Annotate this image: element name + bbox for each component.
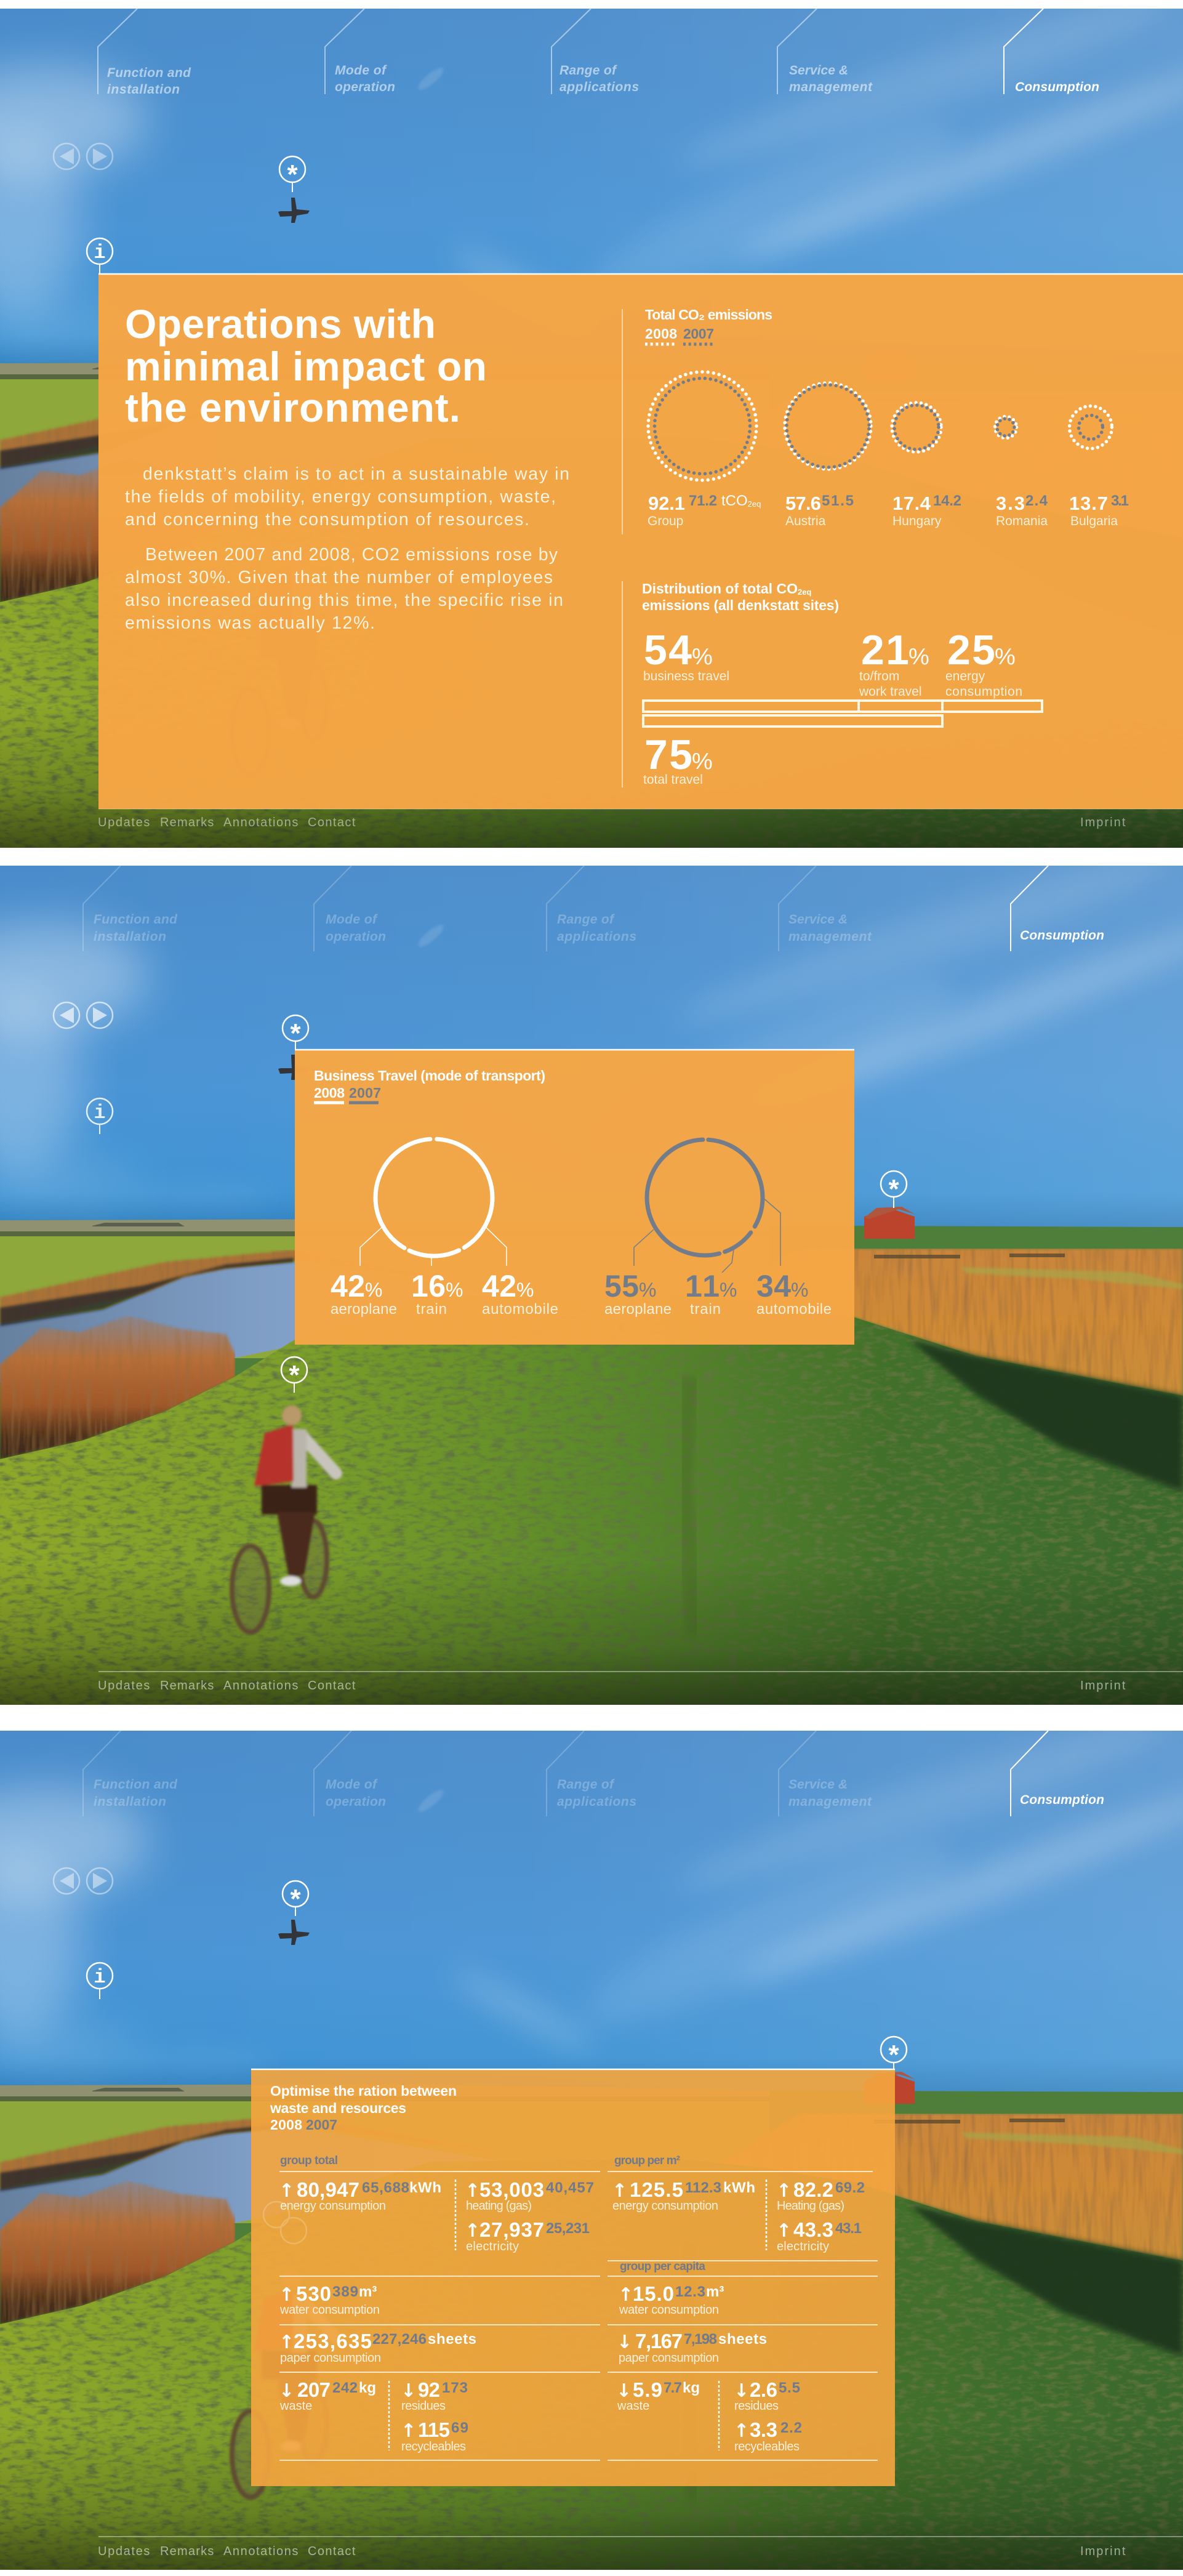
2007 values: 55 <box>604 1269 639 1303</box>
water consumption: m³ <box>359 2284 377 2300</box>
total travel: total travel <box>643 773 703 787</box>
values and country labels: tCO <box>721 493 748 509</box>
body text: almost 30%. Given that the number of employees <box>125 568 553 587</box>
paper consumption <box>279 2330 476 2365</box>
energy per square metre: 112.3 <box>685 2180 721 2196</box>
percentages <box>643 627 1022 699</box>
2007 values: 11 <box>685 1269 720 1303</box>
percentages: consumption <box>945 685 1022 699</box>
percentages: % <box>908 644 929 670</box>
heating and electricity per square metre: 43.1 <box>835 2220 862 2237</box>
paper consumption: ↑ <box>279 2332 294 2353</box>
navigation tabs: Service & <box>788 912 848 927</box>
icon: star marker on barn <box>881 1171 907 1208</box>
navigation tabs: Consumption <box>1020 928 1104 943</box>
footer links: Imprint <box>1080 816 1126 829</box>
chart heading and legend <box>645 307 772 344</box>
orange content panel <box>98 274 1183 809</box>
navigation tabs: management <box>789 80 873 94</box>
panel: overview with CO2 emissions <box>0 0 1183 848</box>
orange chart panel <box>295 1050 854 1345</box>
energy consumption <box>279 2178 441 2213</box>
navigation tabs: installation <box>94 930 166 944</box>
waste, residues, recycleables: 207 <box>297 2378 331 2401</box>
heating and electricity per square metre: 82.2 <box>793 2178 833 2201</box>
2008 values: 42 <box>482 1269 516 1303</box>
waste per capita: kg <box>683 2380 700 2396</box>
heating and electricity per square metre <box>776 2178 865 2253</box>
percentages: work travel <box>859 685 922 699</box>
values and country labels: 57.6 <box>785 493 821 514</box>
navigation tabs: Service & <box>789 63 848 78</box>
navigation tabs: operation <box>335 80 395 94</box>
waste, residues, recycleables: kg <box>359 2380 376 2396</box>
heating and electricity per square metre: Heating (gas) <box>777 2199 844 2213</box>
chart heading: Distribution of total CO <box>642 581 798 597</box>
icon: previous and next arrows <box>54 143 113 169</box>
chart heading and legend: Business Travel (mode of transport) <box>314 1068 545 1084</box>
navigation tabs: operation <box>326 1795 386 1809</box>
navigation tabs: Mode of <box>326 912 378 927</box>
chart heading and legend: 2007 <box>349 1085 381 1101</box>
paper per capita: ↓ <box>617 2332 632 2353</box>
table: group total: group total <box>280 2154 338 2167</box>
icon: info marker <box>87 238 113 274</box>
waste, residues, recycleables: 92 <box>418 2378 440 2401</box>
footer links <box>98 1672 1183 1693</box>
body text: Between 2007 and 2008, CO2 emissions rose by <box>145 545 558 565</box>
waste per capita: residues <box>734 2399 779 2413</box>
waste per capita: 2.6 <box>750 2378 777 2401</box>
water consumption: water consumption <box>279 2303 380 2317</box>
percentages: to/from <box>859 669 899 683</box>
waste, residues, recycleables: residues <box>401 2399 446 2413</box>
title: minimal impact on <box>125 344 487 389</box>
heating and electricity per square metre: ↑ <box>776 2220 792 2242</box>
paper consumption: paper consumption <box>280 2351 381 2365</box>
icon: star marker on plane <box>279 156 305 192</box>
icon: star marker on plane <box>283 1881 308 1916</box>
waste, residues, recycleables: ↑ <box>401 2420 416 2442</box>
body text: the fields of mobility, energy consumption, waste, <box>125 487 556 507</box>
2008 values: % <box>446 1279 463 1301</box>
body text: denkstatt’s claim is to act in a sustainable way in <box>143 464 569 484</box>
footer links: Contact <box>308 816 356 829</box>
heating and electricity <box>465 2178 594 2253</box>
navigation tabs <box>83 1731 1104 1816</box>
2008 values: automobile <box>482 1301 558 1318</box>
body text: emissions was actually 12%. <box>125 613 375 633</box>
total travel: 75 <box>644 731 692 778</box>
panel: business travel <box>0 836 1183 1705</box>
water per capita: ↑ <box>618 2284 633 2306</box>
icon: previous and next arrows <box>54 1868 113 1894</box>
heating and electricity per square metre: 43.3 <box>793 2218 833 2241</box>
values and country labels: 14.2 <box>933 493 961 509</box>
values and country labels: Austria <box>785 514 826 528</box>
chart heading and legend: 2007 <box>683 326 714 342</box>
footer links: Contact <box>308 1679 356 1693</box>
chart heading and legend <box>314 1068 545 1103</box>
panel heading: 2008 <box>270 2117 302 2133</box>
footer links: Remarks <box>160 816 214 829</box>
panel heading <box>270 2083 457 2133</box>
percentages: business travel <box>643 669 729 683</box>
water consumption: 530 <box>296 2282 331 2305</box>
navigation tabs: applications <box>557 930 636 944</box>
chart heading and legend: 2008 <box>314 1085 345 1101</box>
waste per capita: ↓ <box>616 2380 632 2402</box>
icon: info marker <box>87 1098 113 1134</box>
energy consumption: 65,688 <box>362 2180 409 2196</box>
water per capita: water consumption <box>619 2303 719 2317</box>
navigation tabs: Function and <box>94 912 178 927</box>
icon: previous and next arrows <box>54 1002 113 1028</box>
2008 values: % <box>516 1279 534 1301</box>
title: Operations with <box>125 301 436 347</box>
water per capita: 15.0 <box>633 2282 674 2305</box>
dotted circles <box>648 372 1112 480</box>
navigation tabs: Mode of <box>326 1777 378 1792</box>
chart: total CO2 emissions <box>622 307 1129 534</box>
footer links: Remarks <box>160 1679 214 1693</box>
waste, residues, recycleables <box>279 2378 468 2453</box>
percentages: % <box>995 644 1016 670</box>
icon: star marker on plane: * <box>290 1018 301 1049</box>
icon: info marker: i <box>94 1101 106 1124</box>
values and country labels: 92.1 <box>648 493 685 514</box>
table: group total <box>279 2154 600 2460</box>
2007 values: % <box>791 1279 808 1301</box>
waste, residues, recycleables: 173 <box>442 2380 468 2396</box>
navigation tabs: operation <box>326 930 386 944</box>
heating and electricity per square metre: ↑ <box>776 2180 792 2202</box>
icon: star marker on cyclist: * <box>289 1360 300 1390</box>
heating and electricity: 40,457 <box>546 2180 594 2196</box>
translucent orange panel <box>251 2069 895 2486</box>
values and country labels: 17.4 <box>892 493 931 514</box>
paper per capita: 7,167 <box>635 2330 683 2353</box>
navigation tabs: installation <box>107 83 180 97</box>
heating and electricity: 27,937 <box>479 2218 544 2241</box>
energy consumption: energy consumption <box>280 2199 386 2213</box>
waste per capita: 3.3 <box>750 2418 777 2441</box>
paper consumption: 253,635 <box>294 2330 372 2353</box>
paper per capita: sheets <box>718 2331 767 2348</box>
navigation tabs: management <box>788 1795 872 1809</box>
icon: star marker on barn <box>881 2037 907 2070</box>
waste per capita: 5.9 <box>633 2378 662 2401</box>
energy per square metre <box>612 2178 755 2213</box>
navigation tabs: Range of <box>557 1777 615 1792</box>
footer links: Imprint <box>1080 2545 1126 2558</box>
total travel <box>643 731 713 787</box>
chart heading and legend: 2008 <box>645 326 677 342</box>
icon: info marker <box>87 1963 113 1999</box>
water consumption: 389 <box>332 2284 358 2300</box>
table: group per square metre and per capita: group per capita <box>620 2260 705 2273</box>
footer links: Remarks <box>160 2545 214 2558</box>
percentages: 25 <box>947 627 995 674</box>
footer links <box>98 809 1183 829</box>
footer links: Updates <box>98 1679 150 1693</box>
icon: star marker on plane: * <box>290 1884 301 1914</box>
navigation tabs: applications <box>557 1795 636 1809</box>
waste, residues, recycleables: ↓ <box>401 2380 416 2402</box>
table: group per square metre and per capita <box>608 2154 878 2460</box>
values and country labels: 2.4 <box>1025 493 1048 509</box>
percentages: % <box>692 644 713 670</box>
waste, residues, recycleables: recycleables <box>401 2440 466 2453</box>
navigation tabs: applications <box>559 80 639 94</box>
values and country labels: 51.5 <box>822 493 854 509</box>
panel heading: 2007 <box>306 2117 337 2133</box>
2007 values: % <box>720 1279 737 1301</box>
2007 values: 34 <box>756 1269 791 1303</box>
footer links: Annotations <box>223 816 299 829</box>
footer links: Annotations <box>223 1679 299 1693</box>
footer links: Annotations <box>223 2545 299 2558</box>
energy per square metre: ↑ <box>612 2180 627 2202</box>
energy per square metre: 125.5 <box>630 2178 683 2201</box>
2007 values: train <box>690 1301 721 1318</box>
values and country labels: 3.1 <box>1111 493 1129 509</box>
icon: info marker: i <box>94 1966 106 1989</box>
energy per square metre: energy consumption <box>612 2199 718 2213</box>
values and country labels: Group <box>648 514 683 528</box>
values and country labels: Hungary <box>892 514 942 528</box>
heating and electricity: ↑ <box>465 2180 480 2202</box>
2008 values <box>331 1269 558 1318</box>
2008 values: % <box>365 1279 382 1301</box>
2008 values: train <box>416 1301 447 1318</box>
total travel: % <box>692 749 713 775</box>
water consumption <box>279 2282 380 2317</box>
navigation tabs <box>98 9 1099 97</box>
paper per capita <box>617 2330 767 2365</box>
body text: and concerning the consumption of resources. <box>125 510 529 529</box>
values and country labels: 2eq <box>748 499 761 509</box>
stacked outline bars <box>643 701 1042 727</box>
values and country labels: Bulgaria <box>1070 514 1118 528</box>
waste, residues, recycleables: waste <box>279 2399 312 2413</box>
water per capita: 12.3 <box>675 2284 705 2300</box>
2007 values <box>604 1269 832 1318</box>
panel heading: Optimise the ration between <box>270 2083 457 2099</box>
icon: star marker on plane <box>283 1015 308 1050</box>
values and country labels: 3.3 <box>996 493 1025 514</box>
paper per capita: paper consumption <box>619 2351 719 2365</box>
body text <box>125 464 569 633</box>
navigation tabs: Function and <box>94 1777 178 1792</box>
percentages: energy <box>945 669 985 683</box>
waste per capita <box>616 2378 802 2453</box>
energy consumption: ↑ <box>279 2180 294 2202</box>
icon: star marker on barn: * <box>888 2040 899 2070</box>
chart heading and legend: Total CO₂ emissions <box>645 307 772 323</box>
2008 values: aeroplane <box>331 1301 397 1318</box>
waste per capita: waste <box>617 2399 649 2413</box>
navigation tabs: Range of <box>557 912 615 927</box>
chart heading: emissions (all denkstatt sites) <box>642 597 839 613</box>
footer links: Contact <box>308 2545 356 2558</box>
heating and electricity: electricity <box>466 2240 519 2253</box>
title: the environment. <box>125 385 460 430</box>
chart: distribution of emissions <box>622 581 1042 787</box>
navigation tabs: Consumption <box>1015 80 1099 94</box>
icon: info marker: i <box>94 241 106 264</box>
navigation tabs: Service & <box>788 1777 848 1792</box>
waste per capita: ↓ <box>734 2380 749 2402</box>
paper per capita: 7,198 <box>684 2331 717 2348</box>
chart: 2007 ring <box>604 1140 832 1318</box>
footer links: Imprint <box>1080 1679 1126 1693</box>
waste per capita: 7.7 <box>664 2380 682 2396</box>
navigation tabs: Mode of <box>335 63 387 78</box>
faint markers under panel <box>263 2202 307 2244</box>
water per capita: m³ <box>706 2284 724 2300</box>
waste, residues, recycleables: ↓ <box>279 2380 294 2402</box>
chart heading: 2eq <box>798 587 811 597</box>
icon: star marker on barn: * <box>888 1174 899 1204</box>
panel: waste and resources <box>0 1701 1183 2570</box>
waste, residues, recycleables: 115 <box>418 2418 450 2441</box>
heating and electricity: 53,003 <box>479 2178 544 2201</box>
footer links <box>98 2537 1183 2558</box>
table: group per square metre and per capita: group per m² <box>614 2154 680 2167</box>
heating and electricity: heating (gas) <box>466 2199 532 2213</box>
chart: 2008 ring <box>331 1139 558 1318</box>
2008 values: 16 <box>411 1269 446 1303</box>
heating and electricity: ↑ <box>465 2220 480 2242</box>
values and country labels <box>648 493 1129 528</box>
waste per capita: 5.5 <box>779 2380 800 2396</box>
navigation tabs: installation <box>94 1795 166 1809</box>
footer links: Updates <box>98 816 150 829</box>
values and country labels: 13.7 <box>1069 493 1108 514</box>
2007 values: aeroplane <box>604 1301 672 1318</box>
energy consumption: 80,947 <box>297 2178 359 2201</box>
navigation tabs: management <box>788 930 872 944</box>
percentages: 21 <box>861 627 909 674</box>
water consumption: ↑ <box>279 2284 294 2306</box>
energy consumption: kWh <box>409 2180 441 2196</box>
2008 values: 42 <box>331 1269 365 1303</box>
heating and electricity per square metre: electricity <box>777 2240 829 2253</box>
navigation tabs <box>83 866 1104 951</box>
values and country labels: 71.2 <box>689 493 717 509</box>
values and country labels: Romania <box>996 514 1048 528</box>
water per capita <box>618 2282 724 2317</box>
icon: star marker on plane: * <box>287 159 298 190</box>
navigation tabs: Range of <box>559 63 617 78</box>
waste per capita: ↑ <box>734 2420 749 2442</box>
chart heading <box>642 581 839 613</box>
paper consumption: 227,246 <box>372 2331 427 2348</box>
percentages: 54 <box>644 627 692 674</box>
navigation tabs: Consumption <box>1020 1793 1104 1807</box>
heating and electricity per square metre: 69.2 <box>835 2180 865 2196</box>
paper consumption: sheets <box>428 2331 476 2348</box>
icon: star marker on cyclist <box>281 1357 307 1393</box>
energy per square metre: kWh <box>723 2180 755 2196</box>
heating and electricity: 25,231 <box>546 2220 590 2237</box>
waste, residues, recycleables: 69 <box>451 2420 468 2436</box>
footer links: Updates <box>98 2545 150 2558</box>
2007 values: automobile <box>756 1301 832 1318</box>
panel heading: waste and resources <box>270 2100 406 2116</box>
body text: also increased during this time, the specific rise in <box>125 590 563 610</box>
waste, residues, recycleables: 242 <box>332 2380 358 2396</box>
navigation tabs: Function and <box>107 66 191 80</box>
title <box>125 301 487 430</box>
waste per capita: recycleables <box>734 2440 800 2453</box>
waste per capita: 2.2 <box>780 2420 802 2436</box>
2007 values: % <box>639 1279 656 1301</box>
